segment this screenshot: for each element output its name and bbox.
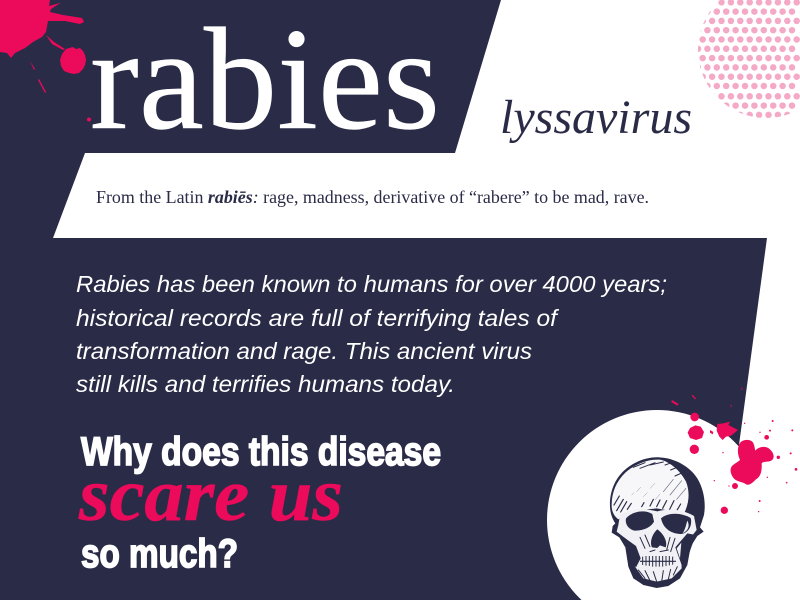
white circle <box>547 410 767 600</box>
icon: skull <box>610 457 705 588</box>
cranium light area <box>612 460 689 519</box>
ink splatter: top left <box>0 0 91 122</box>
intro paragraph: historical records are full of terrifying tales of <box>76 305 560 331</box>
intro paragraph: Rabies has been known to humans for over 4000 years; <box>76 271 667 297</box>
cheek shadows <box>624 537 641 567</box>
intro paragraph: transformation and rage. This ancient virus <box>76 338 533 364</box>
intro paragraph: still kills and terrifies humans today. <box>76 371 455 397</box>
heading: why does this disease scare us so much: Why does this disease <box>81 430 441 474</box>
subtitle: lyssavirus: lyssavirus <box>500 91 692 144</box>
nose cavity <box>651 529 666 548</box>
etymology text: From the Latin rabiēs: rage, madness, derivative of “rabere” to be mad, rave. <box>96 187 649 207</box>
heading: why does this disease scare us so much <box>78 430 441 576</box>
heading: why does this disease scare us so much: so much? <box>81 532 238 576</box>
cranium engraving hatch <box>614 462 686 512</box>
face bone <box>617 509 697 582</box>
face engraving <box>638 535 677 582</box>
dotted pink circle <box>698 0 800 118</box>
title: rabies: rabies <box>90 0 440 160</box>
ink splatter: near skull <box>671 387 797 514</box>
eye sockets <box>626 511 654 531</box>
intro paragraph <box>76 271 667 397</box>
skull silhouette <box>610 457 705 588</box>
heading: why does this disease scare us so much: scare us <box>78 454 343 537</box>
teeth <box>640 556 676 567</box>
